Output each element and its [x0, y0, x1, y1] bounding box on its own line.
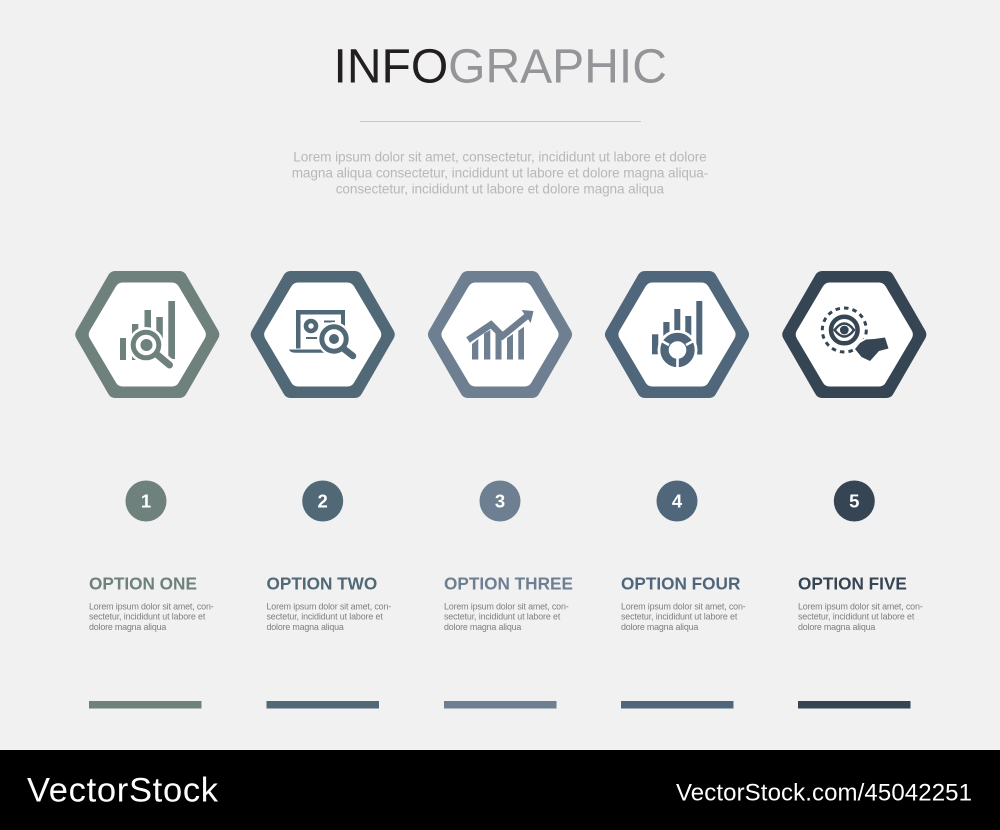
hexagon two — [259, 279, 387, 390]
panel: option one — [83, 279, 214, 708]
number badge five: 5 — [849, 491, 859, 512]
icon: bar chart with donut — [652, 301, 702, 370]
number badge two — [302, 480, 343, 522]
bar: option one — [89, 701, 202, 708]
number badge two: 2 — [318, 491, 328, 512]
text: option one: dolore magna aliqua — [89, 622, 166, 632]
hexagon five — [790, 279, 918, 390]
icon: rising bar chart with arrow — [468, 310, 534, 360]
text: option three: dolore magna aliqua — [444, 622, 521, 632]
intro text block — [292, 150, 708, 197]
text: option three: sectetur, incididunt ut labore et — [444, 612, 561, 622]
text: option one: Lorem ipsum dolor sit amet, con- — [89, 601, 214, 611]
text: option four: sectetur, incididunt ut labore et — [621, 612, 738, 622]
text: option two: sectetur, incididunt ut labore et — [266, 612, 383, 622]
heading: option one: OPTION ONE — [89, 573, 197, 593]
bar: option five — [798, 701, 910, 708]
intro text block: Lorem ipsum dolor sit amet, consectetur, incididunt ut labore et dolore — [293, 150, 707, 165]
number badge three — [480, 480, 520, 522]
text: option five — [798, 601, 923, 632]
heading: option five: OPTION FIVE — [798, 573, 907, 593]
title: INFOGRAPHIC — [334, 41, 667, 94]
number badge one — [126, 480, 166, 522]
number badge one: 1 — [141, 491, 151, 512]
panel: option two — [259, 279, 391, 708]
number badge three: 3 — [495, 491, 505, 512]
text: option two: Lorem ipsum dolor sit amet, con- — [266, 601, 391, 611]
heading: option two: OPTION TWO — [266, 573, 377, 593]
text: option three: Lorem ipsum dolor sit amet, con- — [444, 601, 569, 611]
text: option one: sectetur, incididunt ut labore et — [89, 612, 206, 622]
hexagon one — [83, 279, 211, 390]
text: option four: dolore magna aliqua — [621, 622, 698, 632]
heading: option four: OPTION FOUR — [621, 573, 741, 593]
panel: option five — [790, 279, 923, 708]
text: option four: Lorem ipsum dolor sit amet, con- — [621, 601, 746, 611]
panel: option four — [613, 279, 746, 708]
number badge five — [834, 480, 875, 522]
text: option one — [89, 601, 214, 632]
text: option four — [621, 601, 746, 632]
icon: bar chart with magnifier — [120, 301, 175, 365]
bar: option two — [266, 701, 379, 708]
panel: option three — [436, 279, 573, 708]
text: option five: sectetur, incididunt ut labore et — [798, 612, 915, 622]
footer band — [0, 750, 1000, 830]
intro text block: consectetur, incididunt ut labore et dolore magna aliqua — [336, 182, 664, 197]
footer brand: VectorStock — [27, 772, 219, 810]
icon: eye with hand — [822, 308, 888, 361]
text: option two — [266, 601, 391, 632]
hexagon four — [613, 279, 741, 390]
icon: laptop with magnifier — [289, 310, 353, 356]
text: option five: dolore magna aliqua — [798, 622, 875, 632]
intro text block: magna aliqua consectetur, incididunt ut labore et dolore magna aliqua- — [292, 166, 708, 181]
bar: option four — [621, 701, 734, 708]
text: option five: Lorem ipsum dolor sit amet, con- — [798, 601, 923, 611]
number badge four: 4 — [672, 491, 683, 512]
footer url: VectorStock.com/45042251 — [676, 780, 972, 806]
text: option two: dolore magna aliqua — [266, 622, 344, 632]
bar: option three — [444, 701, 556, 708]
number badge four — [656, 480, 698, 522]
hexagon three — [436, 279, 564, 390]
text: option three — [444, 601, 569, 632]
heading: option three: OPTION THREE — [444, 573, 573, 593]
